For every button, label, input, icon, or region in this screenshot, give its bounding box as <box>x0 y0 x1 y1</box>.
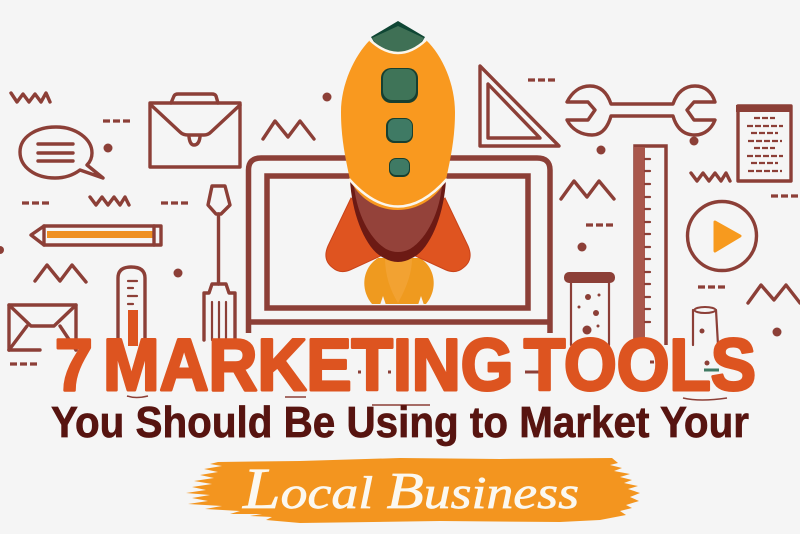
rocket left fin <box>326 198 385 272</box>
icon: test tube with cap <box>564 272 615 345</box>
icon: speech bubble <box>20 127 103 178</box>
rocket right fin <box>411 198 470 272</box>
rocket body <box>341 40 455 210</box>
icon: screwdriver <box>204 186 235 340</box>
subtitle: You Should Be Using to Market Your <box>51 398 749 447</box>
icon: small decorative marks <box>0 80 800 364</box>
rocket window medium <box>386 118 413 143</box>
icon: laptop <box>248 158 550 333</box>
icon: small beaker <box>693 307 718 345</box>
icon: pencil <box>31 226 161 245</box>
icon: rocket <box>326 21 470 305</box>
icon: wrench <box>567 86 715 135</box>
icon: ruler <box>634 146 666 345</box>
rocket flame <box>364 258 434 305</box>
icon: set square <box>480 66 559 146</box>
fragments behind title <box>358 360 719 372</box>
icon: play button <box>688 202 756 270</box>
title: 7 MARKETING TOOLS <box>55 325 756 406</box>
icon: thermometer <box>118 267 145 346</box>
banner text: Local Business <box>242 456 579 521</box>
rocket window large <box>381 68 418 103</box>
rocket nose <box>371 21 425 52</box>
rocket window small <box>389 158 410 177</box>
icon: briefcase <box>150 94 240 167</box>
fragments beneath title <box>127 396 727 405</box>
icon: memo <box>736 105 792 181</box>
brush stroke banner <box>186 458 640 523</box>
icon: envelope <box>9 305 76 350</box>
rocket lower body <box>350 180 446 262</box>
rocket seams <box>349 40 447 206</box>
